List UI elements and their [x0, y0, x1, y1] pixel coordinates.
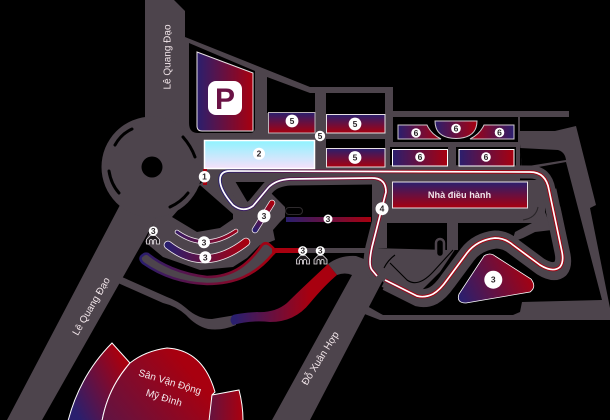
numbered markers: 6	[454, 124, 459, 134]
numbered markers: 2	[257, 149, 262, 159]
numbered markers: 3	[491, 275, 496, 285]
road labels: Đỗ Xuân Hợp	[298, 328, 342, 387]
track road surface	[220, 171, 564, 300]
numbered markers: 3	[318, 246, 323, 256]
block cut-outs between roads	[189, 43, 566, 168]
zone 3 triangle	[458, 254, 534, 303]
headquarters block	[392, 182, 528, 208]
numbered markers	[149, 115, 504, 289]
numbered markers: 3	[300, 246, 305, 256]
headquarters block: Nhà điều hành	[428, 190, 492, 200]
numbered markers: 4	[380, 204, 385, 214]
road labels	[71, 24, 342, 387]
roundabout	[102, 116, 233, 232]
race track line	[220, 171, 563, 297]
parking zone: P	[215, 83, 235, 116]
numbered markers: 6	[484, 152, 489, 162]
numbered markers: 5	[290, 116, 295, 126]
numbered markers: 5	[318, 131, 323, 141]
zone 3 straight bar	[286, 217, 371, 222]
zone 3 pedestrian street	[230, 264, 337, 325]
zone 5 blocks	[268, 112, 385, 167]
numbered markers: 6	[414, 128, 419, 138]
road labels: Lê Quang Đạo	[71, 275, 113, 338]
numbered markers: 3	[203, 252, 208, 262]
road labels: Lê Quang Đạo	[162, 24, 174, 90]
toilet icons	[146, 236, 327, 264]
numbered markers: 6	[497, 128, 502, 138]
numbered markers: 3	[262, 211, 267, 221]
stadium	[68, 343, 243, 420]
numbered markers: 5	[353, 119, 358, 129]
parking zone	[197, 52, 253, 131]
numbered markers: 6	[418, 152, 423, 162]
road detail lines	[286, 207, 538, 283]
numbered markers: 3	[202, 237, 207, 247]
stadium label: Sân Vận Động	[137, 368, 202, 397]
numbered markers: 3	[151, 226, 156, 236]
stadium label: Mỹ Đình	[144, 388, 183, 409]
zone 3 red connector bar	[272, 248, 300, 253]
numbered markers: 1	[202, 172, 207, 182]
numbered markers: 5	[353, 152, 358, 162]
numbered markers: 3	[326, 214, 331, 224]
zone 3 curved bars	[168, 203, 272, 259]
zone 2	[204, 140, 314, 168]
zone 3 tube band	[140, 243, 276, 284]
zone 6 blocks	[392, 121, 514, 166]
